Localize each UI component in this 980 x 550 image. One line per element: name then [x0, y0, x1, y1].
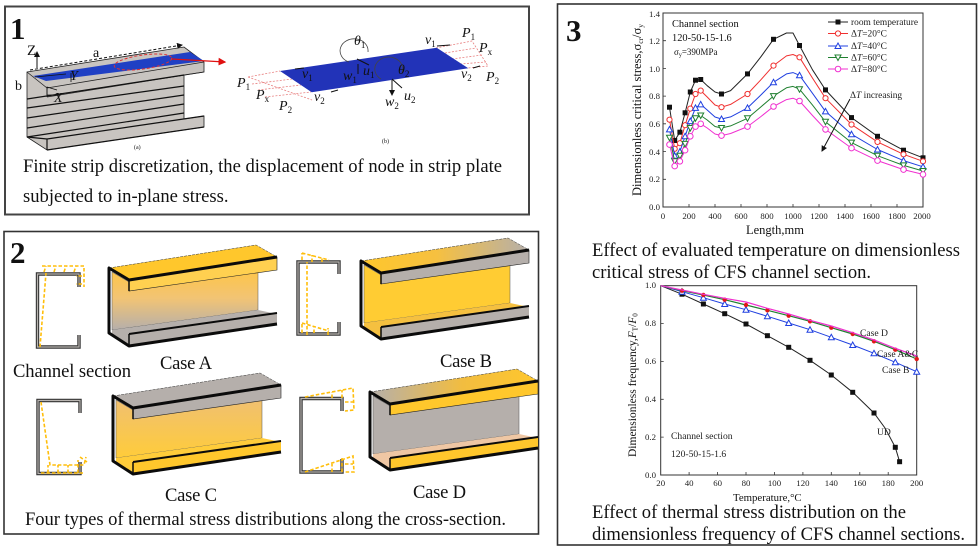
caption: chart 2: dimensionless frequency of CFS channel sections. [592, 524, 965, 545]
displacement and load labels: 1 [431, 39, 436, 49]
y axis title: /σ [630, 27, 644, 38]
heading: panel number 2: 2 [10, 235, 26, 270]
legend: ΔT=80°C [851, 64, 887, 75]
x axis ticks [661, 211, 931, 221]
caption: panel 1: Finite strip discretization, the displacement of node in strip plate [23, 156, 502, 177]
displacement and load labels: 1 [370, 70, 374, 80]
section annotation: σ [674, 47, 679, 57]
beam: case A [109, 245, 277, 346]
curve labels [860, 328, 918, 438]
x axis ticks: 0 [661, 211, 666, 221]
displacement and load labels: x [265, 94, 270, 104]
displacement and load labels: P [486, 70, 495, 85]
y axis ticks: 0.2 [649, 174, 660, 184]
displacement and load labels: 1 [352, 75, 357, 85]
y axis title: cr [636, 37, 645, 44]
displacement and load labels: w [343, 69, 352, 84]
diagram: strip plate with nodal displacements [236, 26, 499, 145]
cross-section: case B load [298, 253, 339, 335]
x axis ticks: 120 [796, 478, 810, 488]
label: case B: Case B [440, 351, 492, 372]
cross-section: channel section, case A load [38, 266, 85, 347]
beam: case C [113, 373, 281, 474]
series: UD [661, 286, 900, 462]
caption: chart 2: Effect of thermal stress distribution on the [592, 502, 906, 523]
panel 1: finite strip discretization [5, 6, 529, 214]
x axis ticks: 200 [910, 478, 924, 488]
label: channel section: Channel section [13, 361, 132, 382]
axis labels on member: X [53, 91, 63, 106]
displacement and load labels: 1 [308, 73, 313, 83]
y axis title: / [627, 323, 639, 327]
chart: dimensionless frequency vs temperature [627, 280, 924, 504]
y axis ticks: 0.4 [649, 147, 661, 157]
axis labels on member: Z [27, 43, 36, 59]
series: delta T 40 [670, 73, 923, 167]
legend: ΔT=60°C [851, 52, 887, 64]
y axis ticks: 1.4 [649, 9, 661, 19]
section annotation: Channel section [671, 431, 733, 442]
x axis ticks: 60 [713, 478, 723, 488]
x axis ticks: 2000 [913, 211, 931, 221]
x axis ticks: 1200 [810, 211, 828, 221]
axis labels on member: a [93, 46, 100, 61]
displacement and load labels: P [279, 99, 288, 114]
beam: case B [361, 238, 529, 339]
arrow: delta T increasing: ΔT increasing [850, 91, 902, 101]
y axis ticks: 0.2 [645, 432, 656, 442]
displacement and load labels: P [237, 76, 246, 91]
displacement and load labels: P [256, 88, 265, 103]
displacement and load labels: u [363, 64, 370, 79]
x axis ticks: 40 [685, 478, 694, 488]
caption: panel 1 [23, 156, 502, 207]
x axis ticks: 1000 [784, 211, 802, 221]
legend: ΔT=20°C [851, 28, 887, 40]
series: delta T 80 [670, 98, 923, 174]
caption: chart 2 [592, 502, 965, 545]
x axis ticks: 400 [708, 211, 722, 221]
chart: critical stress vs length [630, 9, 931, 237]
x axis ticks: 200 [682, 211, 696, 221]
displacement and load labels: θ [398, 63, 405, 78]
caption: panel 2: Four types of thermal stress distributions along the cross-section. [25, 509, 506, 530]
heading: panel number 3: 3 [566, 13, 582, 48]
section annotation: =390MPa [682, 47, 717, 57]
displacement and load labels: 2 [467, 73, 472, 83]
y axis ticks: 0.0 [645, 470, 657, 480]
legend: room temperature [851, 18, 918, 28]
y axis ticks: 1.2 [649, 36, 660, 46]
displacement and load labels: v [461, 67, 467, 82]
y axis ticks [649, 9, 661, 212]
cross-section: case D load [301, 388, 354, 472]
section annotation: y [679, 52, 682, 58]
curve labels: Case D [860, 328, 888, 339]
series: delta T 60 [670, 86, 923, 171]
section annotation [672, 19, 739, 58]
caption: chart 1: Effect of evaluated temperature on dimensionless [592, 240, 960, 261]
series: delta T 20 [670, 54, 923, 161]
x axis title: Length,mm [746, 223, 804, 237]
y axis title: F [627, 316, 639, 325]
x axis ticks: 140 [825, 478, 838, 488]
y axis title: Dimensionless frequency,F [627, 331, 639, 457]
section annotation: 120-50-15-1.6 [672, 33, 732, 44]
displacement and load labels: w [385, 95, 394, 110]
caption: panel 1: subjected to in-plane stress. [23, 186, 229, 207]
caption: chart 1: critical stress of CFS channel section. [592, 262, 871, 283]
x axis ticks: 20 [656, 478, 666, 488]
beam: case D [370, 369, 538, 470]
panel 2: thermal stress distributions [4, 232, 538, 534]
legend: ΔT=40°C [851, 41, 887, 52]
displacement and load labels: 1 [246, 82, 250, 92]
y axis ticks: 0.8 [645, 318, 657, 328]
x axis ticks: 1400 [836, 211, 854, 221]
x axis ticks: 100 [768, 478, 782, 488]
section annotation: Channel section [672, 19, 739, 30]
series: case B [661, 286, 917, 372]
displacement and load labels: v [302, 67, 308, 82]
axis labels on member: (a) [134, 144, 141, 151]
axis labels on member: Y [70, 69, 80, 84]
y axis ticks [645, 280, 657, 480]
axis labels on member: b [15, 79, 22, 94]
label: case D: Case D [413, 482, 466, 503]
y axis title: 0 [632, 313, 640, 317]
y axis ticks: 0.6 [645, 356, 657, 366]
label: case A: Case A [160, 353, 213, 374]
label: case C: Case C [165, 485, 217, 506]
x axis title: Temperature,°C [733, 492, 802, 504]
curve labels: UD [877, 427, 891, 438]
displacement and load labels: x [488, 47, 493, 57]
displacement and load labels: u [404, 89, 411, 104]
curve labels: Case A&C [877, 349, 918, 360]
x axis ticks: 800 [760, 211, 774, 221]
cross-section: case C load [38, 400, 87, 474]
y axis title: T [632, 326, 640, 331]
y axis title: y [636, 24, 645, 28]
x axis ticks [656, 478, 924, 488]
y axis ticks: 0.6 [649, 119, 661, 129]
series: room temperature [670, 33, 923, 158]
displacement and load labels: v [425, 33, 431, 48]
x axis ticks: 80 [742, 478, 751, 488]
section annotation: 120-50-15-1.6 [671, 449, 726, 460]
displacement and load labels: 2 [495, 76, 499, 86]
axis labels on member [15, 43, 141, 151]
displacement and load labels: P [479, 41, 488, 56]
curve labels: Case B [882, 365, 909, 376]
x axis ticks: 600 [734, 211, 748, 221]
series: case A and C [661, 286, 917, 359]
y axis ticks: 0.0 [649, 202, 661, 212]
displacement and load labels: v [314, 90, 320, 105]
displacement and load labels: 2 [288, 105, 292, 115]
displacement and load labels [236, 26, 499, 145]
y axis ticks: 1.0 [649, 64, 661, 74]
diagram: discretized channel member [15, 43, 225, 151]
y axis title: Dimensionless critical stress,σ [630, 44, 644, 196]
panel 3: parametric results [558, 4, 976, 545]
caption: chart 1 [592, 240, 960, 283]
x axis ticks: 160 [853, 478, 867, 488]
series: case D [661, 286, 917, 356]
y axis ticks: 0.8 [649, 91, 661, 101]
displacement and load labels: θ [354, 34, 361, 49]
heading: panel number 1: 1 [10, 11, 26, 46]
y axis ticks: 1.0 [645, 280, 657, 290]
legend [828, 18, 918, 75]
displacement and load labels: 2 [394, 101, 399, 111]
displacement and load labels: P [462, 26, 471, 41]
displacement and load labels: 2 [405, 69, 409, 79]
section annotation [671, 431, 733, 460]
x axis ticks: 1600 [862, 211, 880, 221]
displacement and load labels: 1 [471, 32, 475, 42]
y axis ticks: 0.4 [645, 394, 657, 404]
x axis ticks: 1800 [888, 211, 906, 221]
displacement and load labels: 2 [320, 96, 325, 106]
arrow: delta T increasing [822, 91, 902, 151]
displacement and load labels: 2 [411, 95, 416, 105]
x axis ticks: 180 [882, 478, 895, 488]
displacement and load labels: (b) [382, 138, 389, 145]
displacement and load labels: 1 [361, 40, 365, 50]
